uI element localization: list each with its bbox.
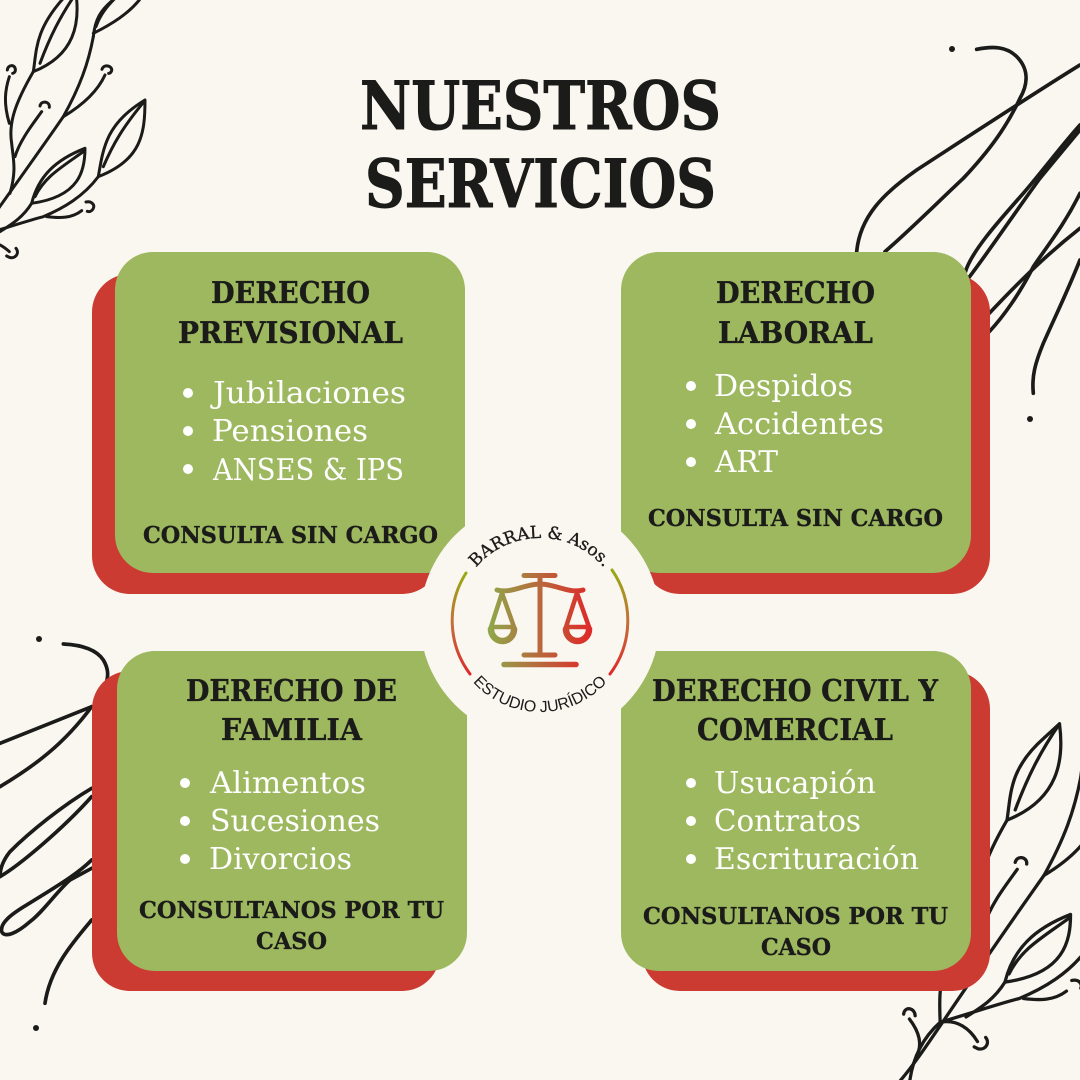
call to action: CONSULTANOS POR TU: [643, 902, 948, 930]
green card: [117, 651, 467, 971]
heading: DERECHO: [716, 276, 875, 311]
logo ring: [452, 570, 628, 674]
brand name: BARRAL & Asos.: [467, 526, 606, 568]
sprig: top left: [0, 0, 145, 258]
heading: [186, 674, 397, 748]
service list: Accidentes: [714, 407, 884, 442]
heading: [716, 276, 875, 351]
green card: [621, 651, 971, 971]
heading: [178, 276, 403, 351]
heading: [652, 674, 939, 748]
dot: top right lower: [1027, 416, 1033, 422]
service list: [180, 766, 380, 877]
logo background circle: [420, 500, 660, 740]
service list: Despidos: [714, 369, 853, 404]
subtitle: ESTUDIO JURÍDICO: [474, 675, 605, 712]
red backing: [642, 274, 990, 594]
call to action: CONSULTA SIN CARGO: [143, 521, 438, 549]
call to action: [139, 896, 444, 955]
service list: [183, 376, 406, 488]
service list: Divorcios: [209, 842, 352, 877]
heading: FAMILIA: [221, 713, 363, 748]
call to action: [643, 902, 948, 961]
red backing: [92, 274, 440, 594]
red backing: [642, 671, 990, 991]
title: SERVICIOS: [365, 145, 716, 223]
heading: PREVISIONAL: [178, 316, 403, 351]
heading: LABORAL: [718, 316, 873, 351]
heading: DERECHO DE: [186, 674, 397, 709]
service list: Jubilaciones: [210, 376, 406, 411]
dot: bottom left lower: [33, 1025, 39, 1031]
panel: derecho laboral: [621, 252, 990, 594]
service list: Usucapión: [714, 766, 876, 801]
service list: ART: [714, 445, 778, 480]
stems: bottom left: [0, 644, 108, 1003]
service list: Pensiones: [212, 414, 368, 449]
heading: DERECHO CIVIL Y: [652, 674, 939, 709]
service list: [686, 766, 919, 877]
title: NUESTROS: [360, 67, 721, 145]
logo: barral & asos: [424, 526, 656, 716]
call to action: CASO: [761, 933, 831, 961]
sprig: bottom right: [900, 724, 1080, 1080]
service list: ANSES & IPS: [212, 453, 404, 488]
service list: [686, 369, 884, 480]
dot: bottom left upper: [36, 636, 42, 642]
green card: [621, 252, 971, 573]
panel: derecho de familia: [92, 651, 467, 991]
heading: DERECHO: [211, 276, 370, 311]
call to action: CONSULTANOS POR TU: [139, 896, 444, 924]
red backing: [92, 671, 440, 991]
stems: top right: [857, 47, 1080, 393]
panel: derecho civil y comercial: [621, 651, 990, 991]
heading: COMERCIAL: [697, 713, 893, 748]
panel: derecho previsional: [92, 252, 465, 594]
service list: Sucesiones: [210, 804, 380, 839]
service list: Alimentos: [209, 766, 366, 801]
service list: Contratos: [714, 804, 861, 839]
green card: [115, 252, 465, 573]
title: [360, 67, 721, 223]
icon: scales of justice: [491, 576, 589, 664]
call to action: CASO: [256, 927, 327, 955]
call to action: CONSULTA SIN CARGO: [648, 504, 943, 532]
dot: top right upper: [949, 46, 955, 52]
service list: Escrituración: [714, 842, 919, 877]
